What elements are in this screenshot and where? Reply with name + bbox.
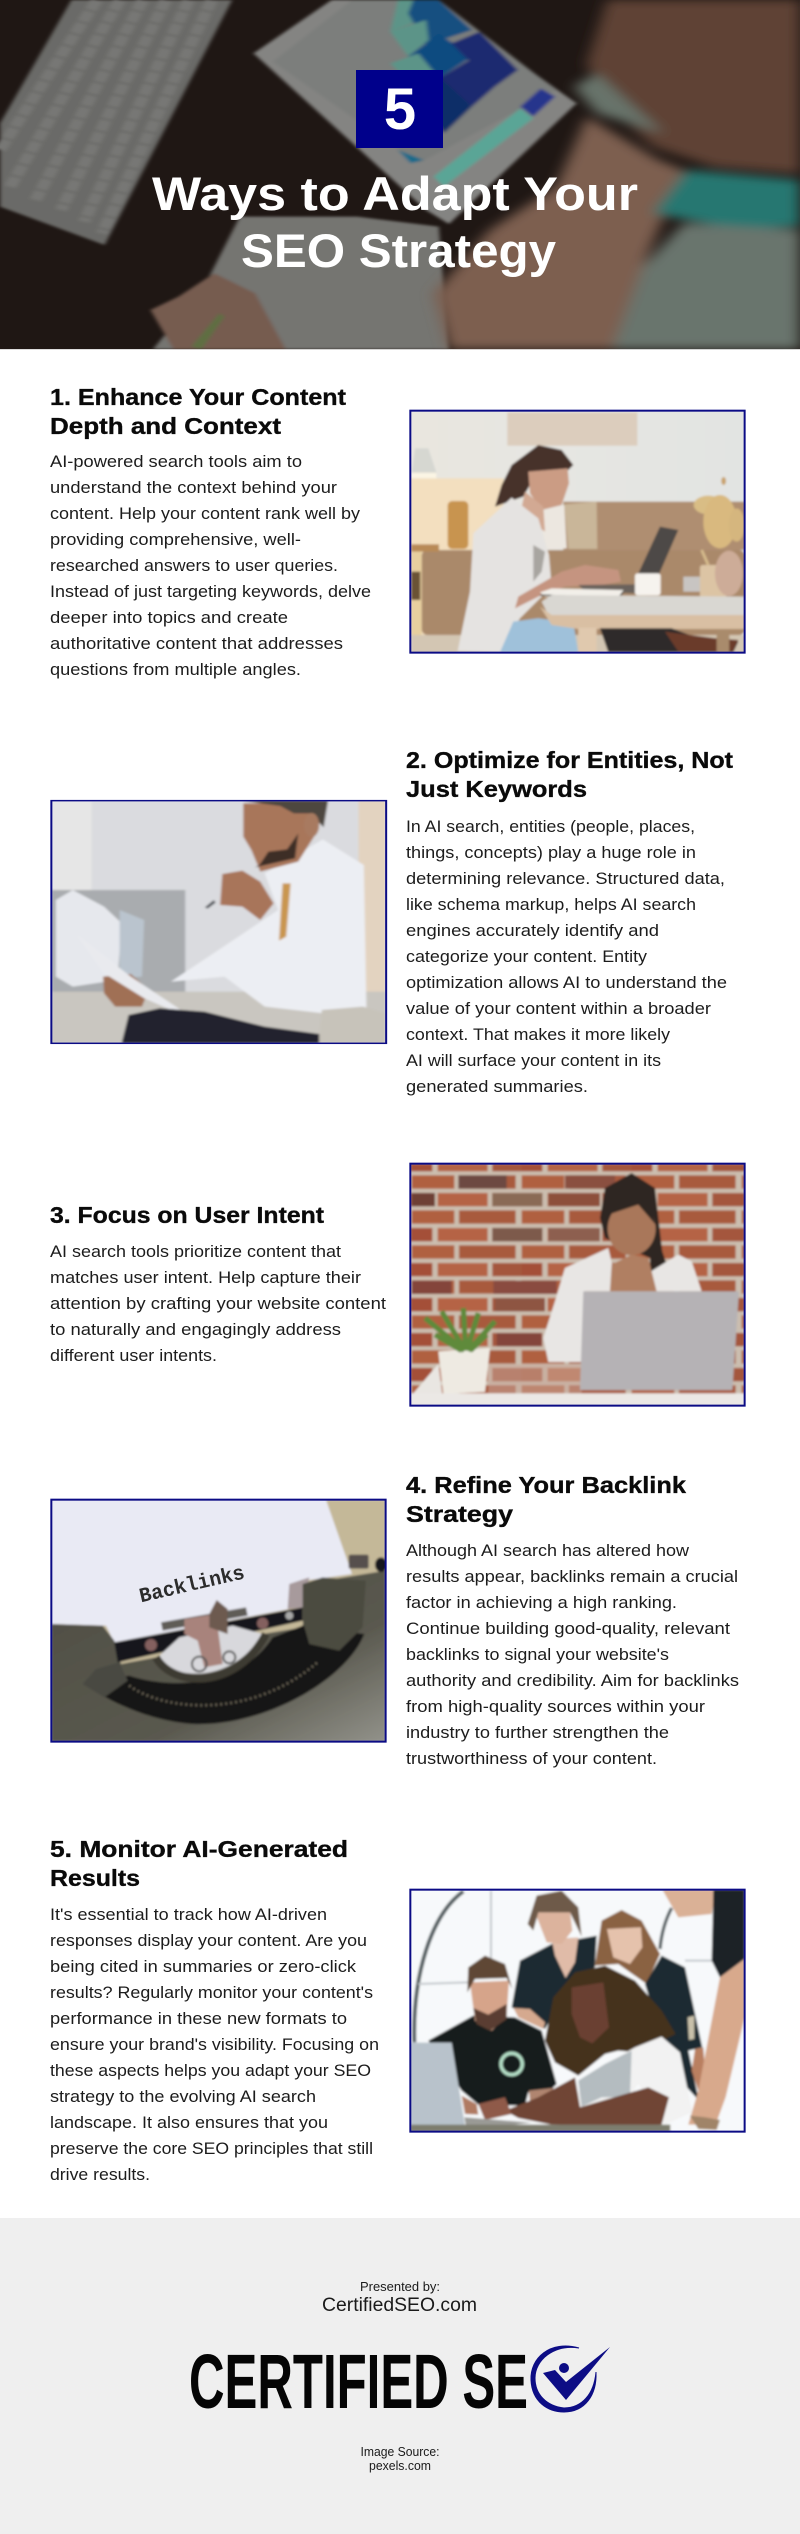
photo: typewriter with Backlinks on paper bbox=[51, 1500, 387, 1742]
body text: section 1 bbox=[50, 453, 371, 679]
panel: section 5 bbox=[50, 1836, 745, 2184]
number badge bbox=[356, 70, 443, 148]
heading: section 1 bbox=[50, 384, 346, 439]
body text: section 5: ensure your brand's visibility. Focusing on bbox=[50, 2036, 379, 2054]
logo: Certified SEO: CERTIFIED SE bbox=[189, 2339, 528, 2425]
image source credit: Image Source: bbox=[360, 2444, 440, 2459]
body text: section 1: AI-powered search tools aim to bbox=[50, 453, 302, 471]
presented by credit: Presented by: bbox=[360, 2279, 440, 2294]
body text: section 2: generated summaries. bbox=[406, 1078, 588, 1096]
heading: section 5: Results bbox=[50, 1865, 140, 1891]
body text: section 2: value of your content within a broader bbox=[406, 1000, 712, 1018]
body text: section 4 bbox=[406, 1542, 739, 1768]
body text: section 1: authoritative content that addresses bbox=[50, 635, 343, 653]
body text: section 3: attention by crafting your website content bbox=[50, 1295, 386, 1313]
body text: section 5: being cited in summaries or zero-click bbox=[50, 1958, 357, 1976]
body text: section 4: from high-quality sources within your bbox=[406, 1698, 706, 1716]
icon: circled check mark bbox=[531, 2346, 610, 2412]
body text: section 1: Instead of just targeting keywords, delve bbox=[50, 583, 371, 601]
heading: section 4 bbox=[406, 1472, 686, 1527]
body text: section 5: preserve the core SEO principles that still bbox=[50, 2140, 373, 2158]
body text: section 2: engines accurately identify and bbox=[406, 922, 659, 940]
heading: section 2 bbox=[406, 747, 733, 802]
body text: section 4: results appear, backlinks remain a crucial bbox=[406, 1568, 738, 1586]
title: SEO Strategy bbox=[241, 224, 556, 277]
panel: footer bbox=[0, 2218, 800, 2534]
heading: section 5 bbox=[50, 1836, 348, 1891]
photo: team around a laptop bbox=[410, 1890, 745, 2132]
heading: section 5: 5. Monitor AI-Generated bbox=[50, 1836, 348, 1862]
panel: hero header bbox=[0, 0, 800, 349]
body text: section 4: Although AI search has altered how bbox=[406, 1542, 689, 1560]
body text: section 4: backlinks to signal your website's bbox=[406, 1646, 669, 1664]
body text: section 5: these aspects helps you adapt your SEO bbox=[50, 2062, 371, 2080]
body text: section 3: to naturally and engagingly address bbox=[50, 1321, 341, 1339]
body text: section 5: results? Regularly monitor your content's bbox=[50, 1984, 373, 2002]
heading: section 2: Just Keywords bbox=[406, 776, 587, 802]
heading: section 2: 2. Optimize for Entities, Not bbox=[406, 747, 733, 773]
photo: typewriter with Backlinks on paper: Backlinks bbox=[137, 1563, 247, 1609]
number badge: 5 bbox=[384, 77, 416, 142]
body text: section 3: matches user intent. Help capture their bbox=[50, 1269, 362, 1287]
body text: section 3: different user intents. bbox=[50, 1347, 217, 1365]
body text: section 4: industry to further strengthen the bbox=[406, 1724, 669, 1742]
body text: section 5: responses display your content. Are you bbox=[50, 1932, 367, 1950]
body text: section 1: deeper into topics and create bbox=[50, 609, 288, 627]
image source credit: pexels.com bbox=[369, 2458, 431, 2473]
presented by credit: CertifiedSEO.com bbox=[322, 2295, 477, 2316]
photo: man reading document bbox=[51, 801, 386, 1043]
body text: section 2 bbox=[406, 818, 727, 1096]
heading: section 3: 3. Focus on User Intent bbox=[50, 1202, 324, 1228]
title bbox=[152, 167, 638, 277]
body text: section 1: understand the context behind your bbox=[50, 479, 338, 497]
heading: section 4: 4. Refine Your Backlink bbox=[406, 1472, 686, 1498]
body text: section 2: things, concepts) play a huge role in bbox=[406, 844, 696, 862]
title: Ways to Adapt Your bbox=[152, 167, 638, 220]
body text: section 5: landscape. It also ensures that you bbox=[50, 2114, 328, 2132]
body text: section 1: content. Help your content rank well by bbox=[50, 505, 361, 523]
heading: section 1: Depth and Context bbox=[50, 413, 281, 439]
presented by credit bbox=[322, 2279, 477, 2316]
image source credit bbox=[360, 2444, 440, 2473]
body text: section 2: optimization allows AI to understand the bbox=[406, 974, 727, 992]
body text: section 4: authority and credibility. Aim for backlinks bbox=[406, 1672, 739, 1690]
body text: section 4: trustworthiness of your content. bbox=[406, 1750, 657, 1768]
hero background photo bbox=[0, 0, 800, 349]
body text: section 1: providing comprehensive, well- bbox=[50, 531, 301, 549]
panel: section 3 bbox=[50, 1164, 745, 1406]
heading: section 4: Strategy bbox=[406, 1501, 513, 1527]
body text: section 3 bbox=[50, 1243, 386, 1365]
body text: section 5: drive results. bbox=[50, 2166, 150, 2184]
panel: section 2 bbox=[51, 747, 733, 1096]
body text: section 2: AI will surface your content in its bbox=[406, 1052, 661, 1070]
body text: section 5 bbox=[50, 1906, 379, 2184]
panel: section 1 bbox=[50, 384, 745, 679]
body text: section 3: AI search tools prioritize content that bbox=[50, 1243, 341, 1261]
body text: section 2: like schema markup, helps AI search bbox=[406, 896, 696, 914]
photo: woman at brick wall with laptop bbox=[410, 1164, 745, 1406]
heading: section 1: 1. Enhance Your Content bbox=[50, 384, 346, 410]
body text: section 5: performance in these new formats to bbox=[50, 2010, 347, 2028]
body text: section 4: factor in achieving a high ranking. bbox=[406, 1594, 677, 1612]
body text: section 2: determining relevance. Structured data, bbox=[406, 870, 725, 888]
panel: section 4 bbox=[51, 1472, 739, 1768]
body text: section 4: Continue building good-quality, relevant bbox=[406, 1620, 730, 1638]
body text: section 5: It's essential to track how AI-driven bbox=[50, 1906, 327, 1924]
photo: woman typing on laptop bbox=[410, 411, 745, 653]
body text: section 5: strategy to the evolving AI search bbox=[50, 2088, 316, 2106]
body text: section 2: categorize your content. Entity bbox=[406, 948, 648, 966]
body text: section 2: context. That makes it more likely bbox=[406, 1026, 671, 1044]
body text: section 2: In AI search, entities (people, places, bbox=[406, 818, 695, 836]
body text: section 1: researched answers to user queries. bbox=[50, 557, 338, 575]
body text: section 1: questions from multiple angles. bbox=[50, 661, 301, 679]
